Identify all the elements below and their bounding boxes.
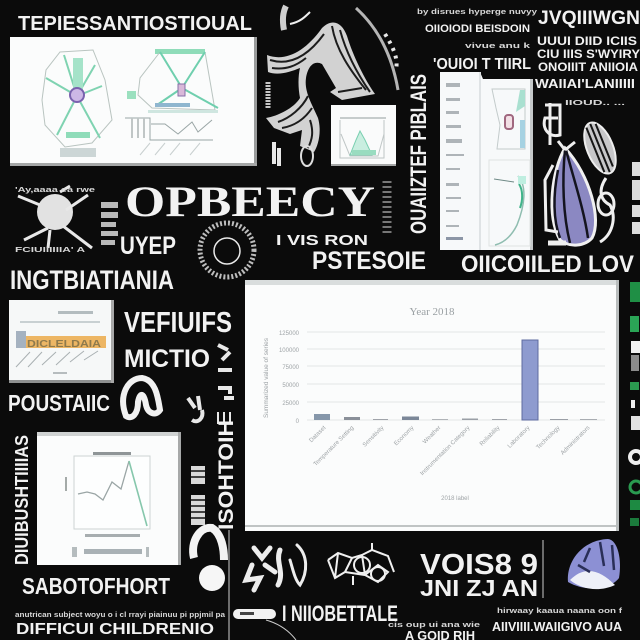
insect legs and antennae <box>544 103 614 243</box>
top right text block: IIOUD.. ... <box>565 100 625 107</box>
x axis labels: Administrators <box>560 425 591 457</box>
dotted side column <box>382 181 392 234</box>
side text column <box>101 202 118 245</box>
x axis labels <box>309 425 591 477</box>
main title: OPBEECY <box>125 179 375 226</box>
panel: main bar chart <box>245 280 619 531</box>
label: voss: VOIS8 9 <box>420 549 538 581</box>
icon: white capsule <box>233 609 296 640</box>
book lower figure <box>489 160 530 246</box>
small text: bottom center: cis oup ui ana wie <box>388 622 480 629</box>
small text: bottom right <box>492 608 623 634</box>
label: uyep: UYEP <box>120 232 176 260</box>
panel: network diagrams <box>10 37 257 166</box>
insect wing <box>578 118 622 178</box>
label: intobettale: I NIIOBETTALE <box>282 601 398 626</box>
label: poustaiic: POUSTAIIC <box>8 390 110 416</box>
x axis labels: Dataset <box>309 425 328 444</box>
x axis labels: Sensitivity <box>362 425 385 449</box>
small text: bottom center <box>388 622 480 640</box>
bars <box>314 340 597 420</box>
illustration: purple insect <box>544 103 622 245</box>
vertical text: near chart <box>191 466 205 525</box>
illustration: sphere with rays: FCIUIIIIIIA' A <box>15 247 85 254</box>
label: pstesoie: PSTESOIE <box>312 247 426 275</box>
small text: bottom right: hirwaay kaaua naana oon f <box>497 608 623 615</box>
right network diagram and line plot <box>125 49 218 155</box>
vertical text: left column: DIUIBUSHTIIIIAS <box>12 435 32 565</box>
x axis labels: Laboratory <box>507 425 531 450</box>
title: top left heading: TEPIESSANTIOSTIOUAL <box>18 13 252 35</box>
label: vefiuifs: VEFIUIFS <box>124 307 232 339</box>
y axis labels: 125000 <box>279 331 300 337</box>
book upper figure <box>492 89 525 149</box>
x axis labels: Instrumentation Category <box>420 425 471 477</box>
top right text block: WAIIAI'LANIIIII <box>535 76 635 91</box>
glyph column: ISOHTOIH <box>215 420 238 530</box>
illustration: sphere with rays <box>15 186 95 254</box>
top right text block <box>417 8 640 107</box>
y axis labels: 25000 <box>282 401 300 407</box>
label: small caption: I VIS RON <box>276 232 368 249</box>
y axis labels: 50000 <box>282 383 300 389</box>
y axis labels: 0 <box>296 419 300 425</box>
top right text block: CIU IIIS S'WYIRY <box>537 47 640 61</box>
left network diagram <box>42 50 112 157</box>
top right text block: vivue anu k <box>465 43 530 50</box>
label: anizan: JNI ZJ AN <box>420 575 538 601</box>
panel: open book with charts <box>440 72 533 250</box>
chart title: Year 2018 <box>409 306 455 318</box>
illustration: branching tree <box>266 6 398 166</box>
vertical heading beside book: OUAIIZTEF PIBLAIS <box>406 74 431 234</box>
illustration: gear circle <box>200 223 254 277</box>
book margin labels <box>446 83 464 240</box>
illustration: sphere with rays: 'Ay,aaaa ea rwe <box>15 187 95 194</box>
small text: bottom left: anutrican subject woyu o i cl rrayi piainuu pi ppjmil pa <box>15 612 225 619</box>
panel: stacked bar card <box>9 300 114 383</box>
x axis title: 2018 label <box>441 496 469 502</box>
top right text block: OIIOIODI BEISDOIN <box>425 23 530 35</box>
x axis labels: Temperature Setting <box>313 425 355 468</box>
icon: blue globe <box>568 539 620 589</box>
y axis labels <box>279 331 300 425</box>
top right text block: UUUI DIID ICIIS <box>537 34 637 48</box>
top right text block: JVQIIIWGN <box>538 8 640 29</box>
icon: molecule network <box>328 543 394 585</box>
x axis labels: Technology <box>536 425 561 451</box>
y axis labels: 100000 <box>279 348 300 354</box>
fragmented glyph block <box>188 345 234 424</box>
x axis labels: Reliability <box>479 425 501 448</box>
insect abdomen <box>552 148 596 245</box>
label: bottom left: DIFFICUI CHILDRENIO <box>16 621 214 638</box>
right margin glyph block <box>632 162 640 234</box>
label: sabotoport: SABOTOFHORT <box>22 573 170 599</box>
icon: white blob <box>123 378 160 417</box>
y axis labels: 75000 <box>282 365 300 371</box>
panel: line chart card <box>37 432 181 565</box>
panel: small chart card <box>331 105 396 166</box>
icon: scribble cluster <box>246 545 306 590</box>
panel: stacked bar card: DICLELDAIA <box>27 339 101 350</box>
label: mictio: MICTIO <box>124 345 210 373</box>
top right text block: ONOIIIT ANIIOIA <box>538 60 638 74</box>
small text: bottom right: AIIVIIII.WAIIGIVO AUA <box>492 619 623 634</box>
right edge strip <box>630 282 640 526</box>
y axis title: Summarized value of series <box>264 338 270 418</box>
top right text block: by disrues hyperge nuvyy <box>417 9 537 16</box>
heading: left: INGTBIATIANIA <box>10 265 174 295</box>
x axis labels: Economy <box>393 425 415 447</box>
x axis labels: Weather <box>422 425 442 445</box>
top right text block: 'OUIOI T TIIRL <box>433 56 531 73</box>
icon: loop with white dot <box>193 528 225 591</box>
